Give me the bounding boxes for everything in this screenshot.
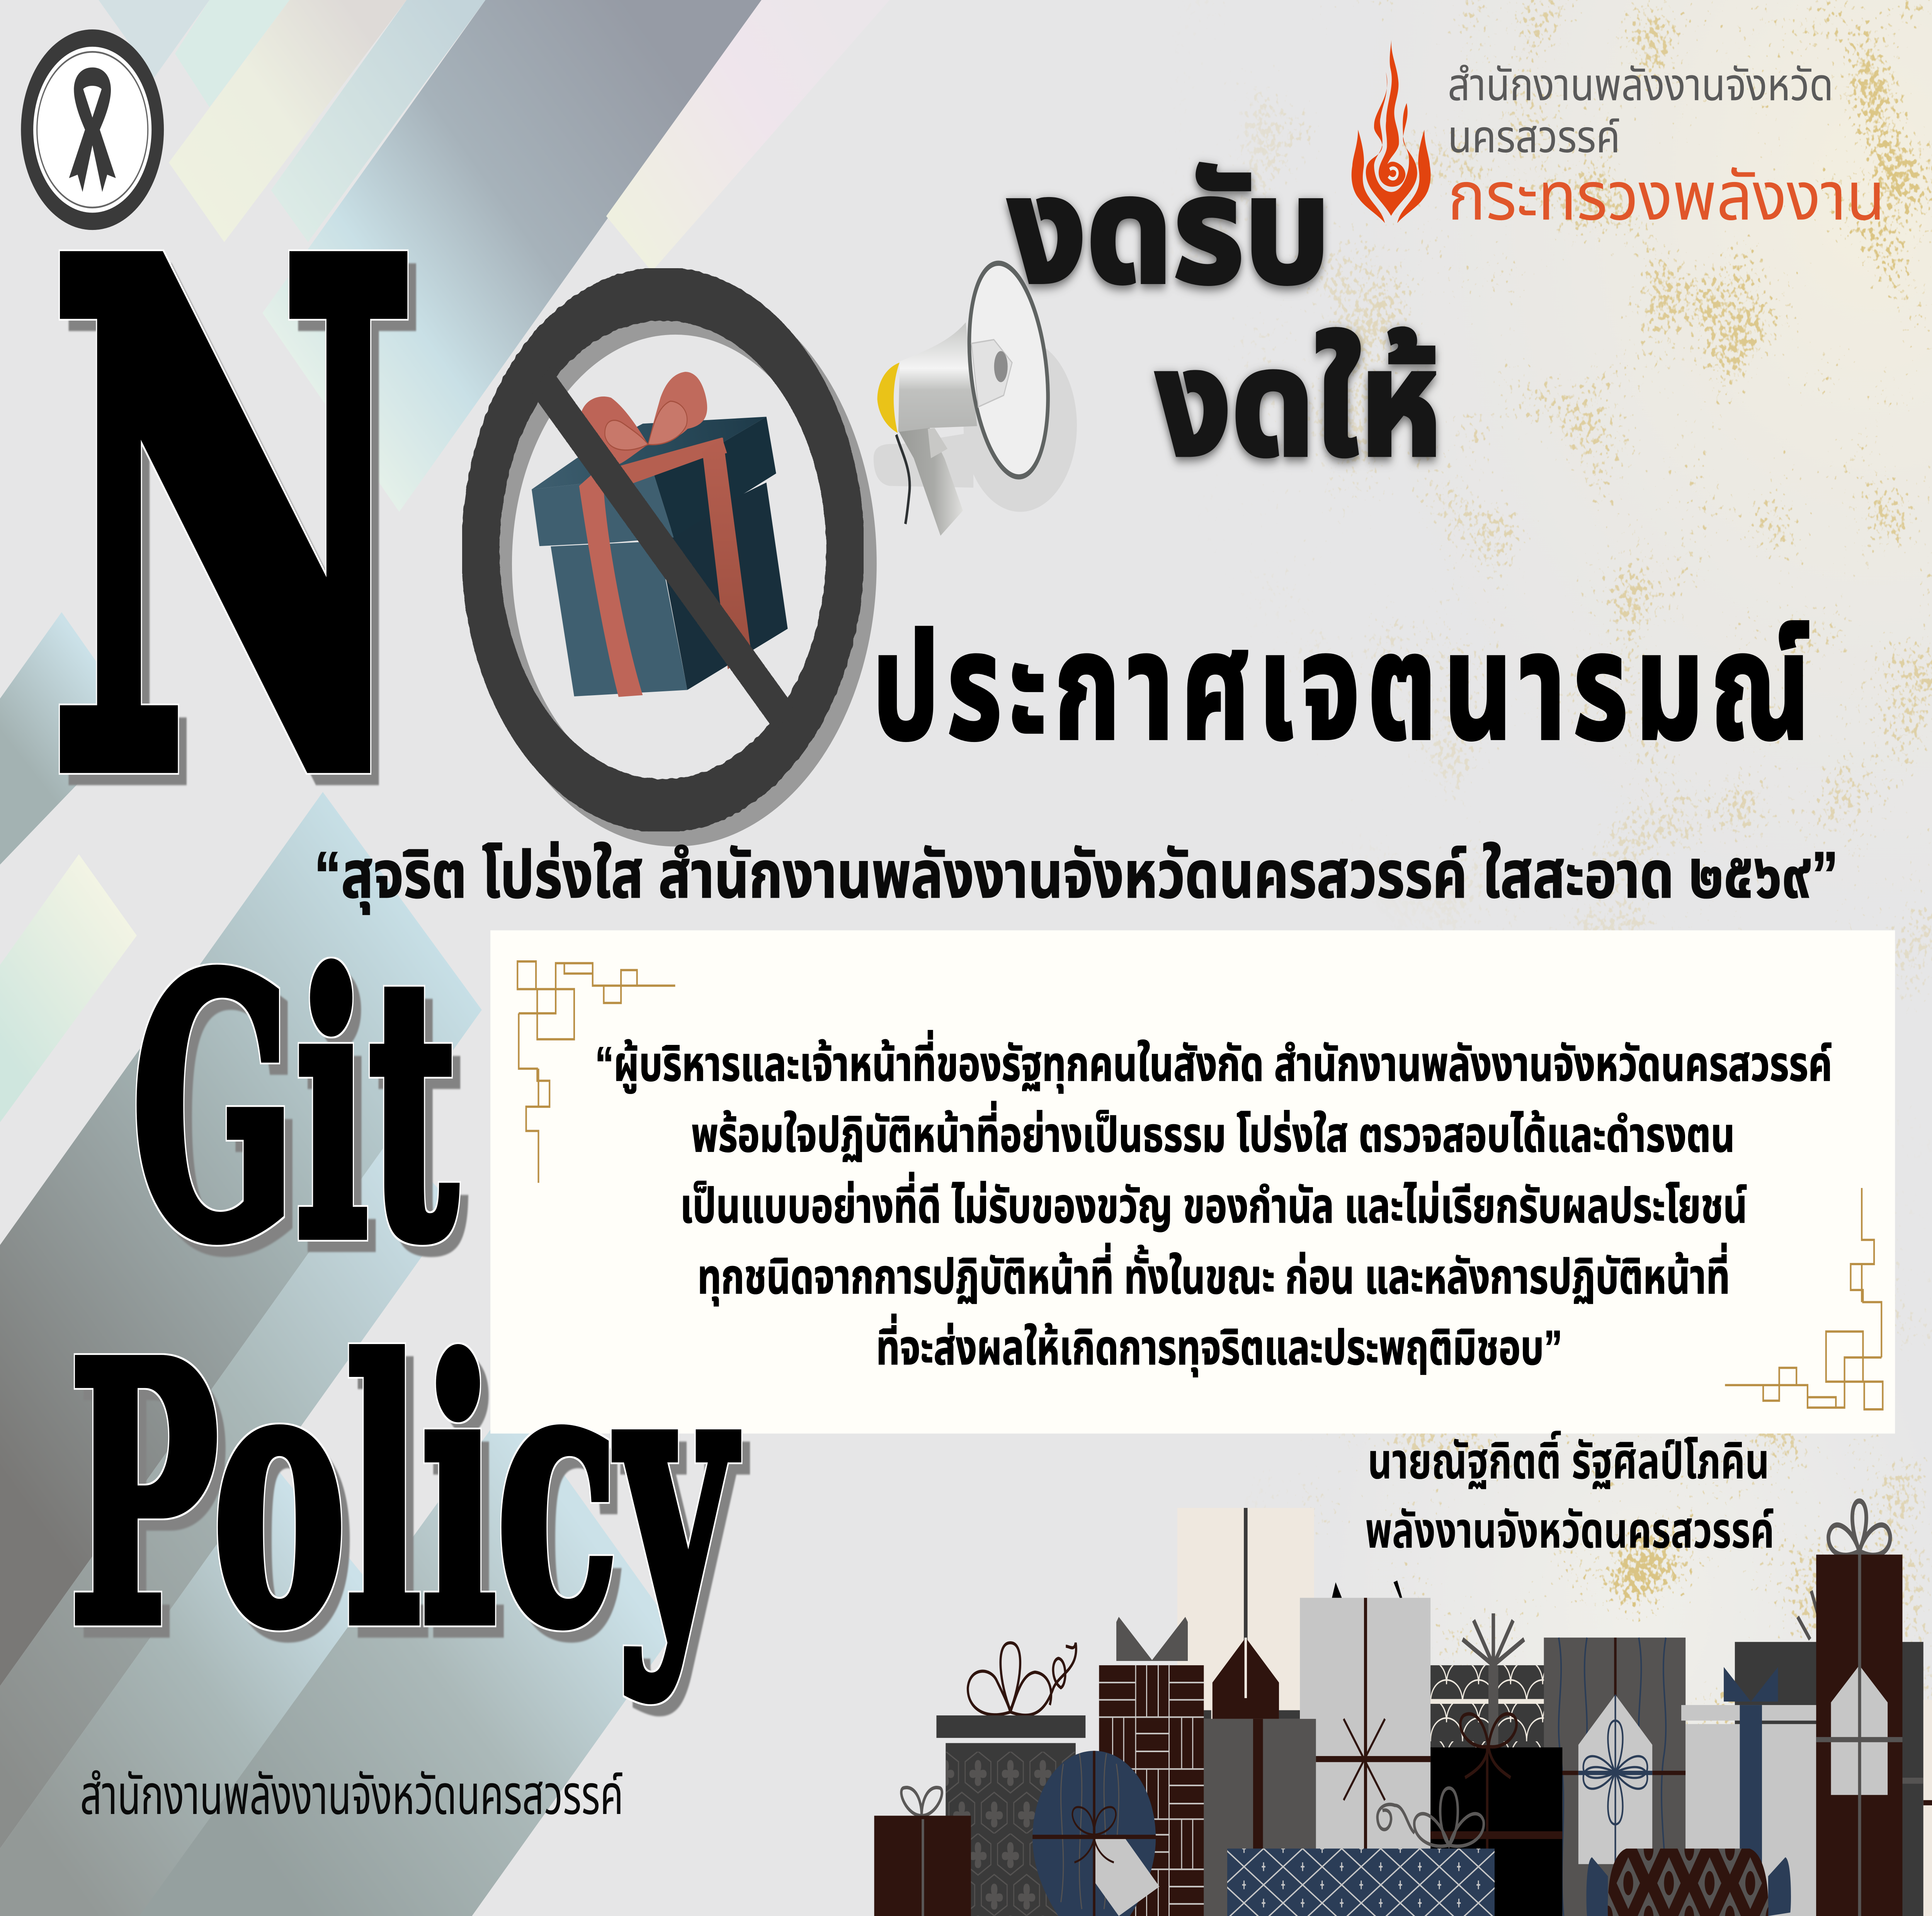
logo: Ministry of Energy xyxy=(1352,40,1885,234)
signature xyxy=(1365,1431,1774,1559)
tall brown box xyxy=(1816,1501,1902,1916)
bell xyxy=(958,254,1059,486)
subtitle quote: “สุจริต โปร่งใส สำนักงานพลังงานจังหวัดนครสวรรค์ ใสสะอาด ๒๕๖๙” xyxy=(314,838,1838,915)
headline: งดรับ: งดรับ xyxy=(1008,148,1331,313)
logo text: province: นครสวรรค์ xyxy=(1448,112,1620,162)
cream texture wash: top right xyxy=(1343,0,1932,934)
diagonal bands: lower left xyxy=(0,612,675,1916)
small brown box with bow xyxy=(874,1787,971,1916)
decorative gold frame top left xyxy=(517,961,675,1183)
statement text: ที่จะส่งผลให้เกิดการทุจริตและประพฤติมิชอบ” xyxy=(876,1314,1562,1377)
cable xyxy=(896,435,910,524)
signer name: นายณัฐกิตติ์ รัฐศิลป์โภคิน xyxy=(1368,1431,1769,1489)
navy oval gift xyxy=(1032,1751,1160,1916)
brick pattern box xyxy=(1099,1617,1204,1916)
signer title: พลังงานจังหวัดนครสวรรค์ xyxy=(1365,1502,1774,1559)
navy diamond pattern box xyxy=(1227,1848,1495,1916)
illustration: gift boxes xyxy=(874,1501,1932,1916)
cream texture wash: lower right xyxy=(1318,1159,1932,1916)
light box with navy ribbon xyxy=(1681,1667,1821,1916)
driver xyxy=(971,340,1012,407)
prohibition ring xyxy=(481,294,845,806)
dark box back right xyxy=(1735,1591,1932,1916)
big word: Policy: Policy xyxy=(69,1286,739,1703)
handle xyxy=(898,427,963,536)
grey patterned box xyxy=(1544,1638,1685,1916)
megaphone shadow xyxy=(964,339,1077,512)
sign shadow xyxy=(493,308,857,820)
cream tall box xyxy=(1177,1508,1314,1719)
black box with bow xyxy=(1378,1714,1562,1916)
icon: megaphone xyxy=(874,254,1077,536)
statement text: ทุกชนิดจากการปฏิบัติหน้าที่ ทั้งในขณะ ก่อน และหลังการปฏิบัติหน้าที่ xyxy=(697,1243,1730,1306)
statement text: พร้อมใจปฏิบัติหน้าที่อย่างเป็นธรรม โปร่งใส ตรวจสอบได้และดำรงตน xyxy=(691,1101,1735,1162)
prohibition slash xyxy=(541,380,785,719)
heading: declaration of intent: ประกาศเจตนารมณ์ xyxy=(872,604,1817,770)
decorative gold frame bottom right xyxy=(1725,1188,1883,1409)
big word: Git: Git xyxy=(132,901,458,1317)
icon: gift in prohibition sign xyxy=(481,294,857,820)
icon: black ribbon xyxy=(69,68,116,192)
dark grey box with brown bow xyxy=(1204,1638,1316,1916)
statement text xyxy=(595,1030,1832,1377)
gift box xyxy=(532,372,788,697)
yellow cap xyxy=(877,362,900,433)
panel: statement xyxy=(490,930,1895,1434)
logo text: office: สำนักงานพลังงานจังหวัด xyxy=(1448,60,1833,110)
horn xyxy=(898,322,977,432)
diagonal bands: top left xyxy=(99,0,889,512)
gold speckle texture xyxy=(1219,0,1932,1822)
headline: งดให้: งดให้ xyxy=(1156,320,1442,487)
dark box with scale pattern xyxy=(1430,1613,1545,1748)
patterned box with lid and bow xyxy=(936,1643,1085,1916)
big letter N: N xyxy=(51,123,415,919)
icon: flame emblem xyxy=(1352,40,1431,223)
organisation footer: สำนักงานพลังงานจังหวัดนครสวรรค์ xyxy=(80,1764,624,1826)
statement text: “ผู้บริหารและเจ้าหน้าที่ของรัฐทุกคนในสังกัด สำนักงานพลังงานจังหวัดนครสวรรค์ xyxy=(595,1030,1832,1094)
logo text: ministry: กระทรวงพลังงาน xyxy=(1448,159,1885,234)
grey box with star ribbon xyxy=(1300,1581,1430,1850)
candy shaped gift xyxy=(1586,1848,1791,1916)
mourning ribbon badge xyxy=(21,29,164,230)
statement text: เป็นแบบอย่างที่ดี ไม่รับของขวัญ ของกำนัล และไม่เรียกรับผลประโยชน์ xyxy=(680,1172,1747,1233)
